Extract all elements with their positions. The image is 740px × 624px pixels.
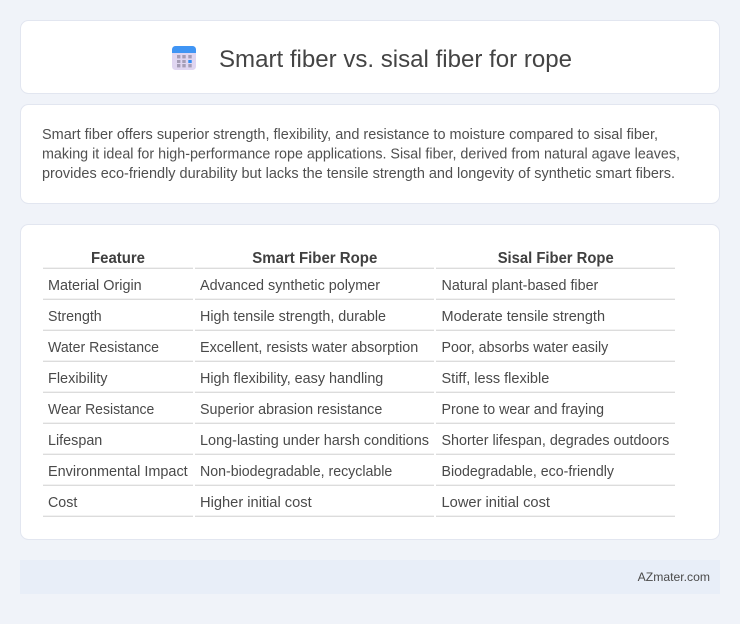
row: wear resistance: Prone to wear and fraying xyxy=(442,402,604,418)
row: cost: Cost xyxy=(48,495,77,511)
row: wear resistance: Superior abrasion resistance xyxy=(200,402,382,418)
table header: Feature xyxy=(91,250,145,267)
row: wear resistance xyxy=(48,402,604,418)
table header: Smart Fiber Rope xyxy=(252,250,377,267)
row: lifespan: Long-lasting under harsh conditions xyxy=(200,433,429,449)
row: flexibility: High flexibility, easy handling xyxy=(200,371,383,387)
footer xyxy=(20,560,720,594)
panel: title card xyxy=(20,20,720,94)
row: environmental impact: Environmental Impact xyxy=(48,464,188,480)
row: water resistance: Poor, absorbs water easily xyxy=(442,340,609,356)
row: lifespan xyxy=(48,433,669,449)
row: environmental impact: Non-biodegradable, recyclable xyxy=(200,464,392,480)
row: material origin: Natural plant-based fiber xyxy=(442,278,599,294)
row: environmental impact xyxy=(48,464,615,480)
table header: Sisal Fiber Rope xyxy=(498,250,614,267)
row: strength: High tensile strength, durable xyxy=(200,309,386,325)
row: material origin xyxy=(48,278,599,294)
row: material origin: Material Origin xyxy=(48,278,142,294)
heading: Smart fiber vs. sisal fiber for rope xyxy=(219,46,572,73)
row: cost: Lower initial cost xyxy=(442,495,550,511)
table header xyxy=(91,250,614,267)
row: environmental impact: Biodegradable, eco-friendly xyxy=(442,464,615,480)
row: flexibility: Flexibility xyxy=(48,371,108,387)
row: flexibility: Stiff, less flexible xyxy=(442,371,549,387)
text block: summary paragraph xyxy=(42,127,680,182)
row: water resistance: Excellent, resists water absorption xyxy=(200,340,418,356)
row: lifespan: Lifespan xyxy=(48,433,102,449)
row: cost xyxy=(48,495,550,511)
text block: summary paragraph: making it ideal for high-performance rope applications. Sisal fiber, derived from natural agave leaves, xyxy=(42,146,680,162)
row: lifespan: Shorter lifespan, degrades outdoors xyxy=(442,433,669,449)
row: flexibility xyxy=(48,371,549,387)
row: cost: Higher initial cost xyxy=(200,495,312,511)
row: wear resistance: Wear Resistance xyxy=(48,402,154,418)
row: water resistance: Water Resistance xyxy=(48,340,159,356)
panel: comparison table xyxy=(20,224,720,540)
row: strength xyxy=(48,309,605,325)
row: water resistance xyxy=(48,340,609,356)
panel: summary xyxy=(20,104,720,204)
row: material origin: Advanced synthetic polymer xyxy=(200,278,380,294)
footer brand text: AZmater.com xyxy=(638,570,710,584)
icon: calendar xyxy=(172,46,196,70)
row: strength: Moderate tensile strength xyxy=(442,309,605,325)
text block: summary paragraph: Smart fiber offers superior strength, flexibility, and resistance to moisture compared to sisal fiber, xyxy=(42,127,658,143)
text block: summary paragraph: provides eco-friendly durability but lacks the tensile strength and longevity of synthetic smart fibers. xyxy=(42,166,675,182)
row: strength: Strength xyxy=(48,309,102,325)
